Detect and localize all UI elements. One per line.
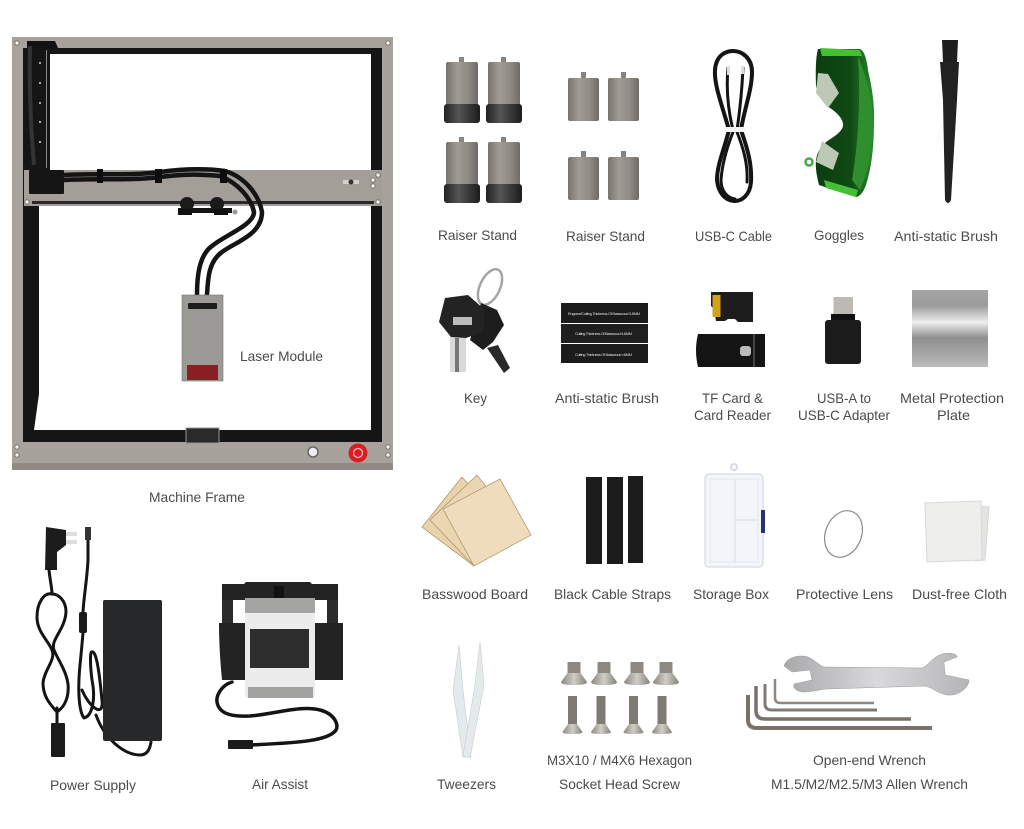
item: protective lens xyxy=(818,505,869,563)
item: open-end wrench xyxy=(784,653,969,695)
item: metal protection plate xyxy=(912,290,988,367)
AC cord xyxy=(37,570,68,725)
label: M3X10 / M4X6 Hexagon Socket Head Screw: Socket Head Screw xyxy=(559,776,681,792)
label: Metal Protection Plate: Plate xyxy=(937,407,970,423)
label: Key: Key xyxy=(464,390,487,406)
label: Dust-free Cloth: Dust-free Cloth xyxy=(912,586,1007,602)
power plug xyxy=(45,527,77,570)
label: Open-end Wrench and Allen Wrench xyxy=(771,752,968,792)
item: thickness reference cards: Engrave/Cutting Thickness Of Basswood 3-5MM xyxy=(568,311,640,316)
frame outer body xyxy=(12,37,393,470)
display window xyxy=(250,629,309,668)
bottom hinge xyxy=(186,428,219,443)
label: Anti-static Brush: Anti-static Brush xyxy=(894,228,998,244)
label: Goggles: Goggles xyxy=(814,227,864,243)
air pump body xyxy=(245,598,315,613)
item: raiser stands short xyxy=(568,72,639,200)
item: anti-static brush xyxy=(940,40,959,203)
label: Power Supply: Power Supply xyxy=(50,777,136,793)
item: allen wrenches xyxy=(748,679,932,728)
label: Tweezers: Tweezers xyxy=(437,776,496,792)
laser module xyxy=(182,295,223,381)
item: raiser stands with base xyxy=(444,57,522,203)
power knob xyxy=(308,447,318,457)
label: TF Card and Card Reader: Card Reader xyxy=(694,407,771,423)
label: Anti-static Brush second: Anti-static Brush xyxy=(555,390,659,406)
label: Protective Lens: Protective Lens xyxy=(796,586,893,602)
laser module cables xyxy=(64,169,262,295)
label: Metal Protection Plate: Metal Protection xyxy=(900,390,1004,406)
label: TF Card and Card Reader: TF Card & xyxy=(702,390,764,406)
label: Machine Frame: Machine Frame xyxy=(149,489,245,505)
item: dust-free cloth xyxy=(925,501,989,562)
adapter brick xyxy=(103,600,162,741)
IEC connector xyxy=(51,723,65,757)
label: USB-A to USB-C Adapter: USB-A to xyxy=(817,390,871,406)
label: Black Cable Straps: Black Cable Straps xyxy=(554,586,671,602)
label: Raiser Stand second: Raiser Stand xyxy=(566,228,645,244)
frame black inner rails xyxy=(23,48,382,442)
item: key xyxy=(439,266,510,373)
item: tweezers xyxy=(453,642,484,758)
label: Basswood Board: Basswood Board xyxy=(422,586,528,602)
gantry motor box xyxy=(29,170,64,194)
label: Open-end Wrench and Allen Wrench: Open-end Wrench xyxy=(813,752,926,768)
frame corner screws xyxy=(15,41,390,457)
frame white interior xyxy=(34,54,371,430)
label: Metal Protection Plate xyxy=(900,390,1004,423)
item: storage box xyxy=(705,464,765,567)
item: goggles xyxy=(806,48,874,197)
item: thickness reference cards: Cutting Thickness Of Basswood 4-6MM xyxy=(575,331,632,336)
label: M3X10 / M4X6 Hexagon Socket Head Screw: M3X10 / M4X6 Hexagon xyxy=(547,752,692,768)
item: TF card and reader xyxy=(696,292,765,367)
carriage rollers xyxy=(178,197,238,215)
air assist cord xyxy=(217,682,337,745)
label: TF Card and Card Reader xyxy=(694,390,771,423)
label: Raiser Stand: Raiser Stand xyxy=(438,227,517,243)
label: Storage Box: Storage Box xyxy=(693,586,769,602)
label: Laser Module: Laser Module xyxy=(240,348,323,364)
mount bracket xyxy=(222,582,338,600)
item: USB adapter xyxy=(825,297,861,364)
item: power supply xyxy=(37,527,162,757)
label: Air Assist: Air Assist xyxy=(252,776,308,792)
item: air assist xyxy=(217,582,343,749)
item: hexagon socket screws xyxy=(561,662,679,734)
Y-axis cable chain xyxy=(27,41,58,168)
item: USB-C cable xyxy=(715,51,752,201)
label: USB-C Cable: USB-C Cable xyxy=(695,228,772,244)
item: thickness reference cards xyxy=(561,303,648,363)
item: black cable straps xyxy=(586,476,643,564)
label: USB-A to USB-C Adapter xyxy=(798,390,890,423)
item: basswood boards xyxy=(422,475,531,566)
label: USB-A to USB-C Adapter: USB-C Adapter xyxy=(798,407,890,423)
air assist connector xyxy=(228,740,253,749)
DC cord xyxy=(79,540,151,755)
label: Open-end Wrench and Allen Wrench: M1.5/M2/M2.5/M3 Allen Wrench xyxy=(771,776,968,792)
item: thickness reference cards: Cutting Thickness Of Basswood >6MM xyxy=(575,352,632,357)
emergency stop button xyxy=(348,444,368,462)
panel: machine frame xyxy=(12,37,393,470)
ferrite bead xyxy=(79,612,87,633)
label: M3X10 / M4X6 Hexagon Socket Head Screw xyxy=(547,752,692,792)
gantry beam xyxy=(24,170,382,206)
